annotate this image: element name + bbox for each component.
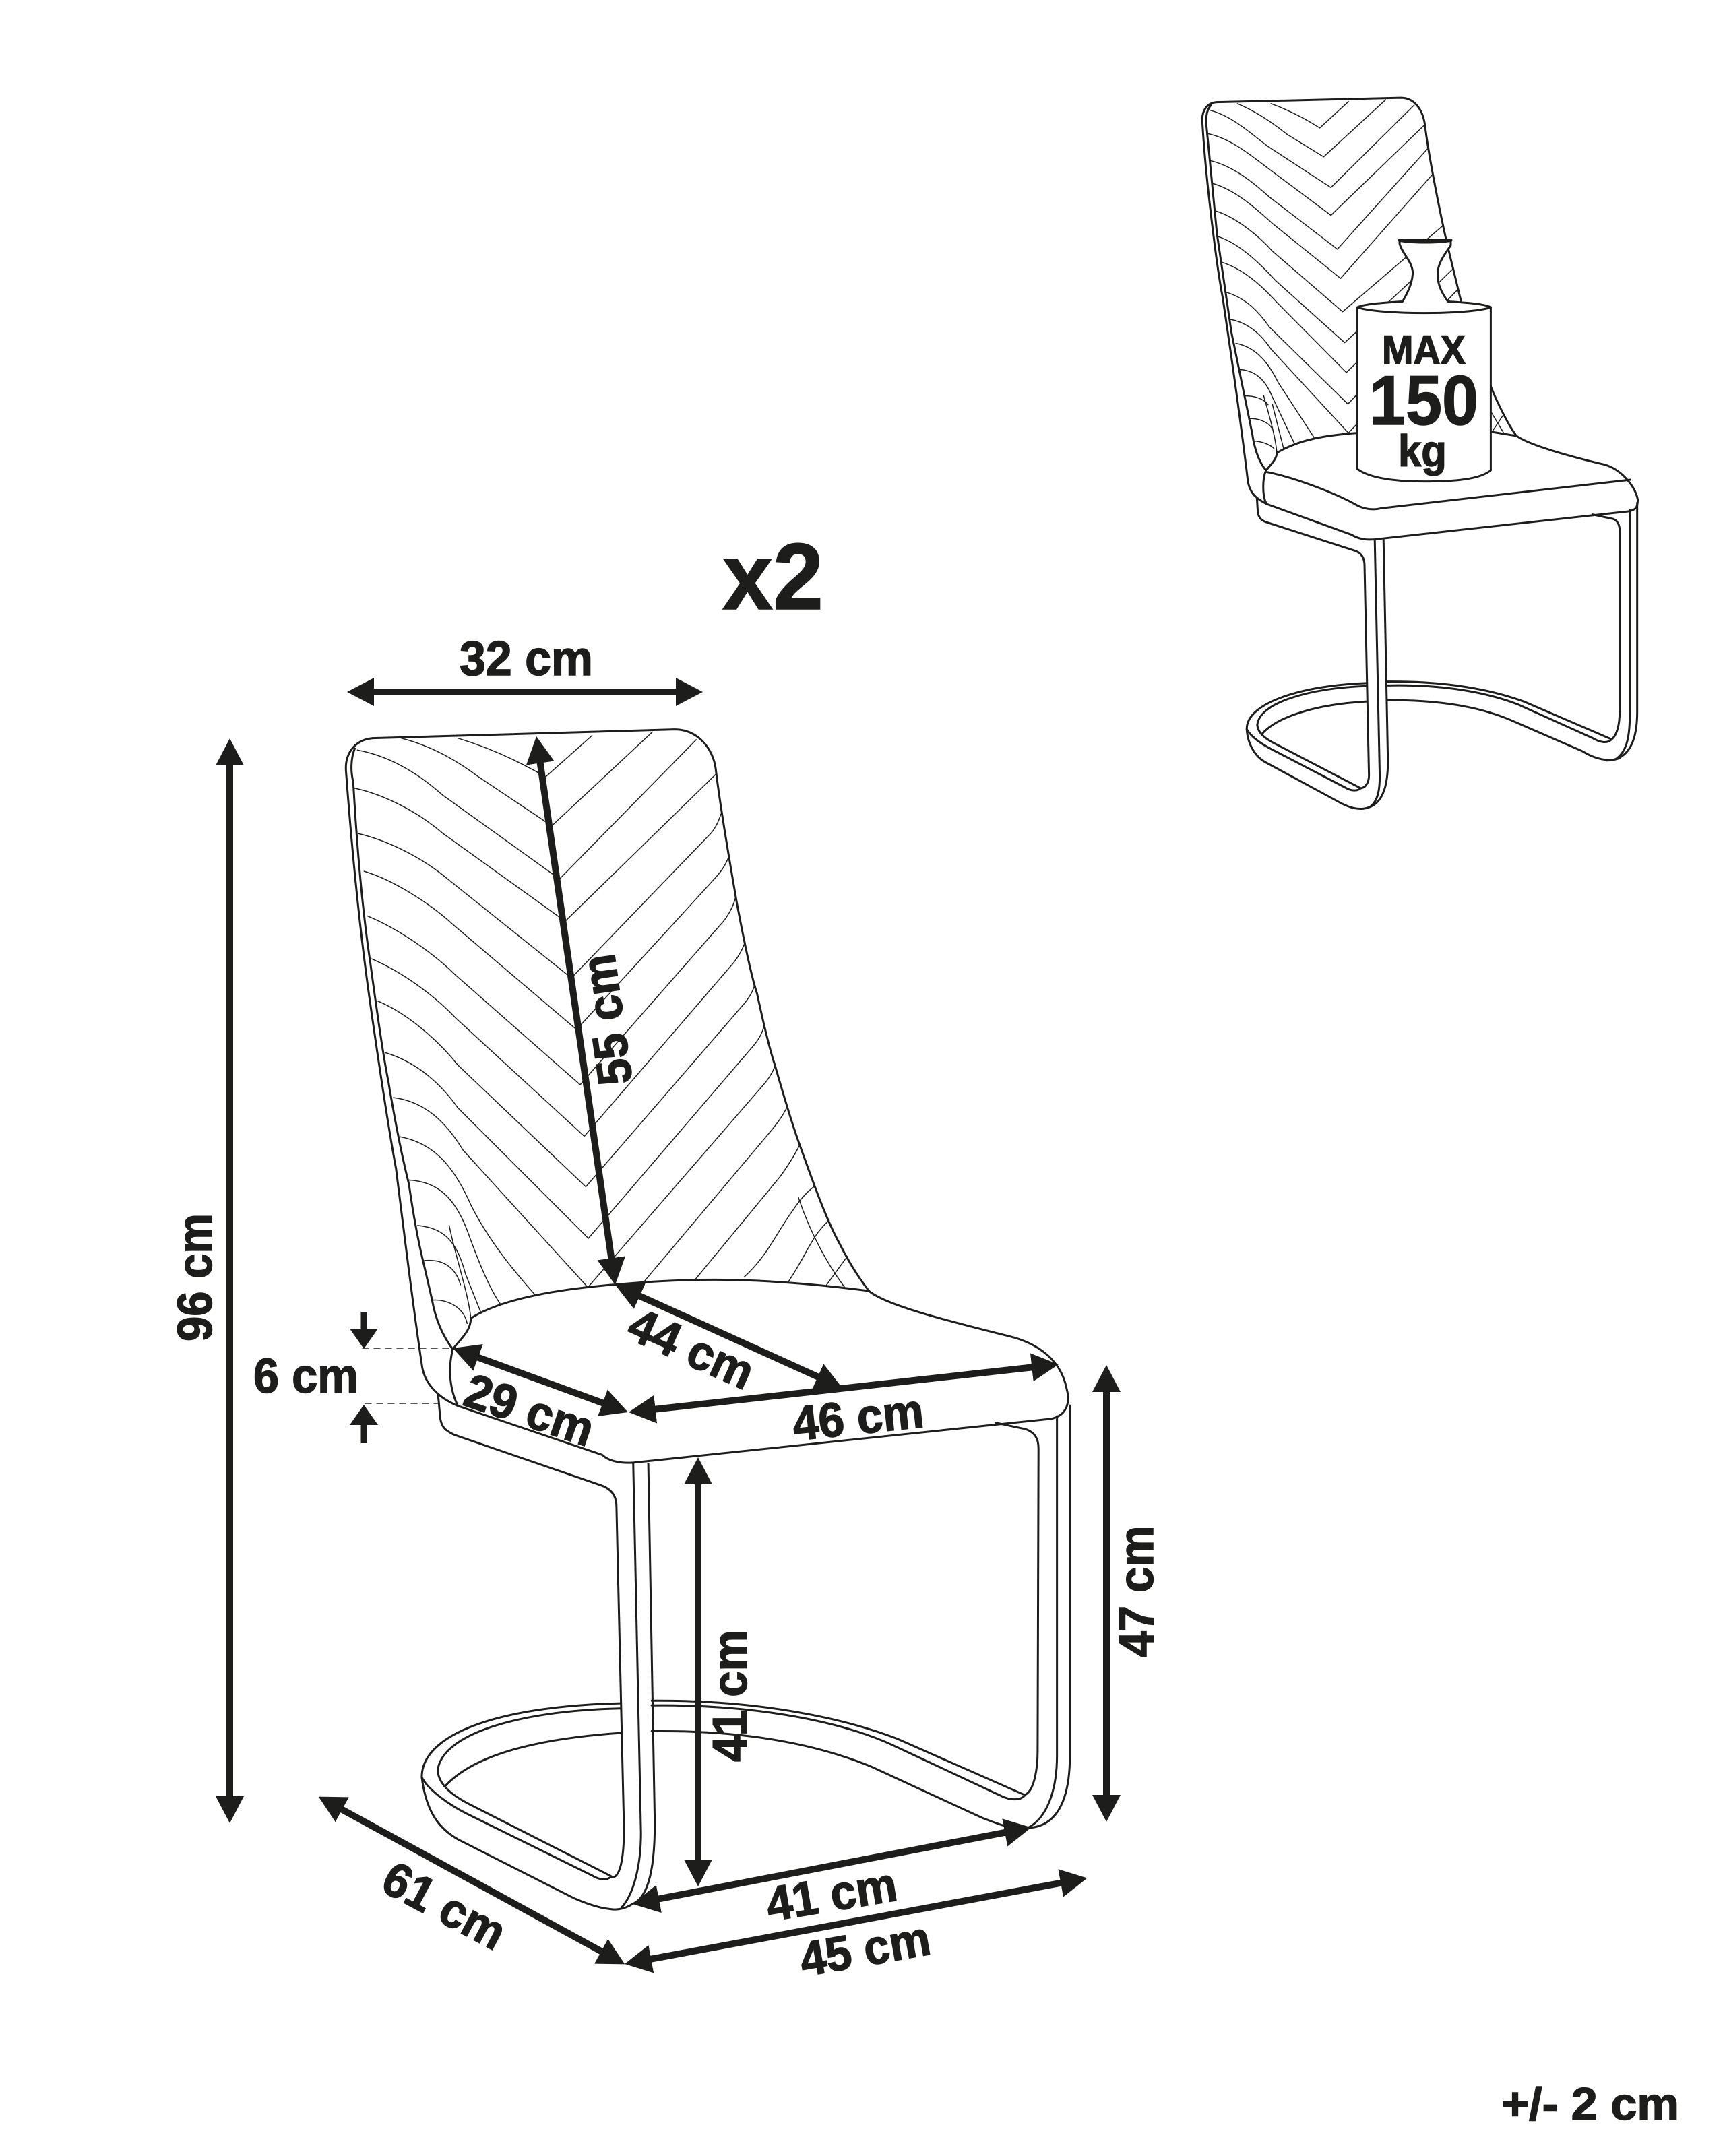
label: 61 cm: 61 cm (373, 1851, 515, 1961)
seat thickness dashed guides (363, 1348, 453, 1403)
weight label kg: kg (1398, 426, 1447, 476)
chair back outline and seat (346, 730, 1068, 1463)
weight label 150: 150 (1369, 362, 1478, 440)
chair back hatching (355, 732, 847, 1323)
chair cantilever base (422, 1395, 1070, 1909)
label: 41 cm vertical: 41 cm (703, 1630, 757, 1762)
label: 55 cm: 55 cm (571, 951, 643, 1088)
arrow: 44 cm seat depth (633, 1293, 824, 1380)
label: 41 cm horizontal: 41 cm (762, 1858, 901, 1932)
label: 46 cm: 46 cm (790, 1384, 927, 1451)
label: 44 cm: 44 cm (620, 1298, 762, 1400)
arrow: 46 cm seat width (649, 1366, 1038, 1410)
small chair outline and seat (1202, 98, 1638, 540)
arrow: 45 cm outer base width (644, 1882, 1067, 1961)
arrow: 41 cm inner base width (652, 1831, 1011, 1900)
label: 29 cm: 29 cm (458, 1364, 601, 1457)
arrow: 55 cm back height (539, 757, 613, 1265)
label: 47 cm: 47 cm (1110, 1525, 1164, 1657)
weight label MAX: MAX (1382, 327, 1466, 373)
arrow: seat thickness up (361, 1422, 367, 1443)
label: 96 cm: 96 cm (168, 1213, 222, 1341)
load capacity chair drawing (1202, 98, 1638, 809)
small chair cantilever base (1247, 499, 1637, 809)
arrow: 61 cm base depth (336, 1806, 607, 1955)
small chair hatching (1208, 100, 1503, 453)
tolerance note: +/- 2 cm (1501, 2079, 1679, 2130)
arrow: 96 cm total height (226, 759, 233, 1803)
quantity label x2: x2 (722, 524, 823, 629)
label: 45 cm: 45 cm (796, 1911, 935, 1988)
main chair line drawing (346, 730, 1070, 1909)
arrow: 29 cm seat side (472, 1355, 609, 1405)
arrow: 47 cm seat height (1103, 1385, 1110, 1802)
weight icon (1357, 240, 1491, 482)
label: 6 cm: 6 cm (253, 1350, 358, 1403)
label: 32 cm: 32 cm (460, 632, 593, 686)
arrow: 41 cm leg height (695, 1478, 701, 1866)
arrow: 32 cm back width (367, 689, 683, 695)
arrow: seat thickness down (361, 1312, 367, 1331)
